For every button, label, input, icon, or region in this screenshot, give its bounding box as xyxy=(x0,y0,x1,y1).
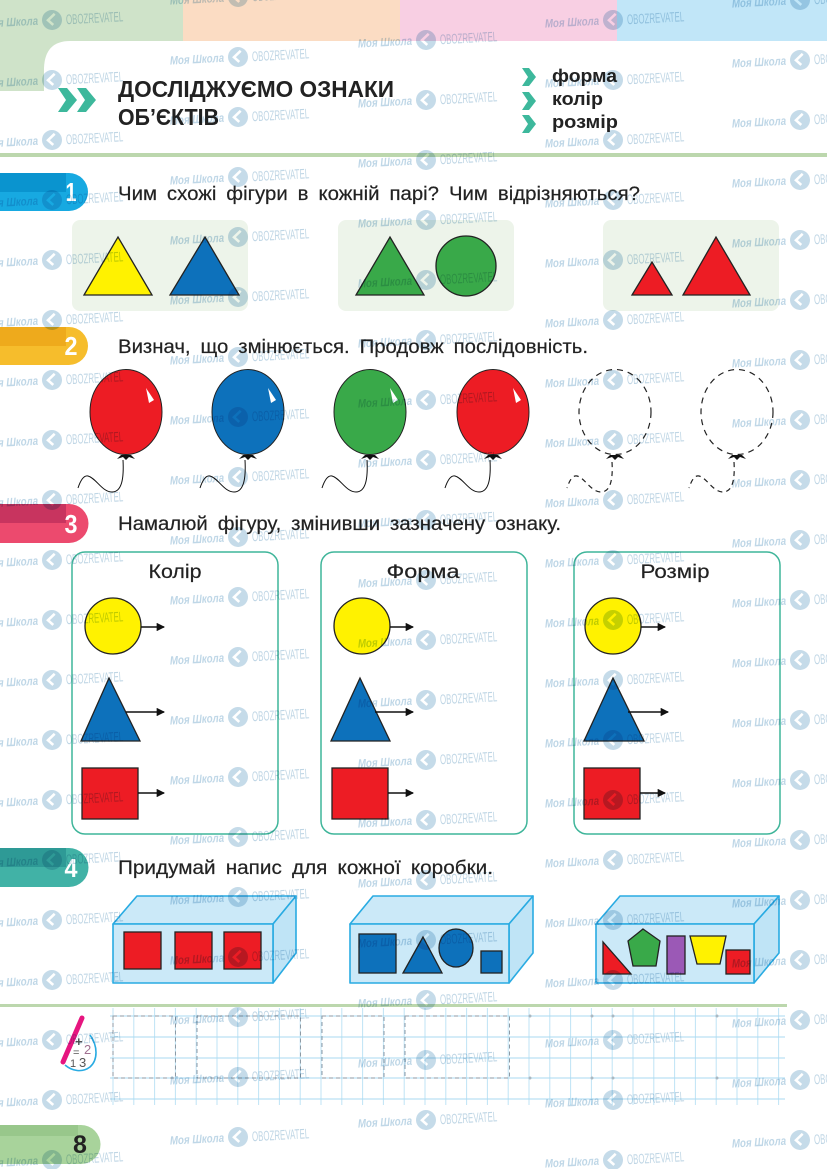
text: OBOZREVATEL xyxy=(252,527,310,545)
text: OBOZREVATEL xyxy=(440,1110,498,1128)
text: OBOZREVATEL xyxy=(627,790,685,808)
text: OBOZREVATEL xyxy=(627,910,685,928)
text: Моя Школа xyxy=(545,195,599,211)
text: OBOZREVATEL xyxy=(66,130,124,148)
text: Моя Школа xyxy=(545,915,599,931)
text: OBOZREVATEL xyxy=(440,210,498,228)
text: OBOZREVATEL xyxy=(252,1007,310,1025)
tab: task 4 xyxy=(0,848,88,887)
text: OBOZREVATEL xyxy=(627,370,685,388)
text: Моя Школа xyxy=(545,375,599,391)
icon: pencil and maths xyxy=(63,1018,96,1071)
text: Моя Школа xyxy=(732,235,786,251)
text: Моя Школа xyxy=(732,175,786,191)
writing grid xyxy=(110,1008,785,1105)
text: Моя Школа xyxy=(170,652,224,668)
text: Моя Школа xyxy=(170,112,224,128)
text: OBOZREVATEL xyxy=(66,1030,124,1048)
tab: task 3 xyxy=(0,504,88,543)
text: Моя Школа xyxy=(545,975,599,991)
text: Моя Школа xyxy=(545,675,599,691)
icon: pencil and maths: 2 xyxy=(84,1042,91,1057)
title xyxy=(118,76,394,130)
text: Моя Школа xyxy=(170,472,224,488)
text: Моя Школа xyxy=(545,1095,599,1111)
text: OBOZREVATEL xyxy=(66,670,124,688)
text: Моя Школа xyxy=(732,775,786,791)
text: Моя Школа xyxy=(170,1132,224,1148)
text: Моя Школа xyxy=(545,255,599,271)
text: Моя Школа xyxy=(358,395,412,411)
text: OBOZREVATEL xyxy=(440,390,498,408)
text: Моя Школа xyxy=(170,292,224,308)
text: OBOZREVATEL xyxy=(252,47,310,65)
text: Моя Школа xyxy=(545,855,599,871)
text: Моя Школа xyxy=(732,535,786,551)
text: Моя Школа xyxy=(732,1015,786,1031)
text: Моя Школа xyxy=(732,715,786,731)
balloon: blue xyxy=(200,370,284,492)
text: OBOZREVATEL xyxy=(66,70,124,88)
text: OBOZREVATEL xyxy=(66,550,124,568)
text: OBOZREVATEL xyxy=(252,167,310,185)
text: Моя Школа xyxy=(358,635,412,651)
topic list: form, colour, size: колір xyxy=(552,89,603,109)
balloon: green xyxy=(322,370,406,492)
text: Моя Школа xyxy=(358,935,412,951)
text: Моя Школа xyxy=(732,835,786,851)
topic list: form, colour, size: розмір xyxy=(552,112,618,132)
text: OBOZREVATEL xyxy=(66,310,124,328)
text: Моя Школа xyxy=(358,875,412,891)
panel: same colour, different shape xyxy=(338,220,514,311)
text: OBOZREVATEL xyxy=(440,870,498,888)
text: Моя Школа xyxy=(170,832,224,848)
text: Моя Школа xyxy=(358,95,412,111)
text: OBOZREVATEL xyxy=(440,270,498,288)
balloon: red second xyxy=(445,370,529,492)
text: OBOZREVATEL xyxy=(440,690,498,708)
text: OBOZREVATEL xyxy=(252,947,310,965)
text: Моя Школа xyxy=(732,55,786,71)
text: Моя Школа xyxy=(170,172,224,188)
panel: size: Розмір xyxy=(640,562,710,583)
text: OBOZREVATEL xyxy=(627,970,685,988)
topic list: form, colour, size: форма xyxy=(552,66,618,86)
icon: pencil and maths: + xyxy=(75,1034,83,1049)
text: OBOZREVATEL xyxy=(440,30,498,48)
text: OBOZREVATEL xyxy=(627,850,685,868)
text: OBOZREVATEL xyxy=(66,790,124,808)
text: Моя Школа xyxy=(732,1075,786,1091)
text: OBOZREVATEL xyxy=(627,250,685,268)
text: OBOZREVATEL xyxy=(440,750,498,768)
panel: same shape, different colour xyxy=(72,220,248,311)
title: ОБ’ЄКТІВ xyxy=(118,104,219,130)
text: OBOZREVATEL xyxy=(252,1067,310,1085)
text: OBOZREVATEL xyxy=(440,90,498,108)
text: Моя Школа xyxy=(545,75,599,91)
text: Моя Школа xyxy=(358,815,412,831)
text: OBOZREVATEL xyxy=(252,767,310,785)
text: OBOZREVATEL xyxy=(252,467,310,485)
text: OBOZREVATEL xyxy=(252,887,310,905)
text: Моя Школа xyxy=(170,52,224,68)
text: OBOZREVATEL xyxy=(66,430,124,448)
title: ДОСЛІДЖУЄМО ОЗНАКИ xyxy=(118,76,394,102)
text: Моя Школа xyxy=(545,15,599,31)
text: OBOZREVATEL xyxy=(627,10,685,28)
text: Моя Школа xyxy=(545,555,599,571)
text: Моя Школа xyxy=(170,952,224,968)
panel: shape xyxy=(321,552,527,834)
text: OBOZREVATEL xyxy=(252,227,310,245)
page number tab: 8 xyxy=(73,1131,87,1159)
text: Моя Школа xyxy=(170,772,224,788)
text: OBOZREVATEL xyxy=(66,970,124,988)
task 2 instruction: Визнач, що змінюється. Продовж послідовність. xyxy=(118,337,588,358)
text: Моя Школа xyxy=(170,232,224,248)
text: OBOZREVATEL xyxy=(252,587,310,605)
text: OBOZREVATEL xyxy=(627,1090,685,1108)
text: OBOZREVATEL xyxy=(440,930,498,948)
panel: size xyxy=(574,552,780,834)
tab: task 4: 4 xyxy=(64,853,78,883)
text: OBOZREVATEL xyxy=(627,1030,685,1048)
text: Моя Школа xyxy=(358,335,412,351)
topic list: form, colour, size xyxy=(522,66,618,133)
text: OBOZREVATEL xyxy=(440,990,498,1008)
text: Моя Школа xyxy=(358,515,412,531)
tab: task 1: 1 xyxy=(66,177,76,207)
balloon: red xyxy=(78,370,162,492)
text: Моя Школа xyxy=(545,1035,599,1051)
balloon: dashed outline two xyxy=(689,370,773,492)
text: OBOZREVATEL xyxy=(440,630,498,648)
text: OBOZREVATEL xyxy=(627,430,685,448)
text: OBOZREVATEL xyxy=(66,730,124,748)
text: OBOZREVATEL xyxy=(440,1050,498,1068)
text: Моя Школа xyxy=(358,35,412,51)
text: OBOZREVATEL xyxy=(66,610,124,628)
task 3 instruction: Намалюй фігуру, змінивши зазначену ознаку. xyxy=(118,514,561,535)
text: OBOZREVATEL xyxy=(252,647,310,665)
text: Моя Школа xyxy=(358,695,412,711)
panel: shape: Форма xyxy=(386,562,460,583)
box: mixed shapes xyxy=(596,896,779,983)
text: Моя Школа xyxy=(545,315,599,331)
text: OBOZREVATEL xyxy=(440,810,498,828)
tab: task 1 xyxy=(0,173,88,211)
panel: colour: Колір xyxy=(148,562,202,583)
box: red squares xyxy=(113,896,296,983)
text: Моя Школа xyxy=(358,1115,412,1131)
text: Моя Школа xyxy=(545,135,599,151)
box: blue shapes xyxy=(350,896,533,983)
text: OBOZREVATEL xyxy=(252,107,310,125)
text: OBOZREVATEL xyxy=(627,130,685,148)
text: Моя Школа xyxy=(358,455,412,471)
panel: same shape, different size xyxy=(603,220,779,311)
tab: task 2: 2 xyxy=(64,331,78,361)
text: Моя Школа xyxy=(358,995,412,1011)
text: OBOZREVATEL xyxy=(66,250,124,268)
panel: colour xyxy=(72,552,278,834)
text: Моя Школа xyxy=(170,532,224,548)
text: OBOZREVATEL xyxy=(66,910,124,928)
text: OBOZREVATEL xyxy=(66,490,124,508)
text: OBOZREVATEL xyxy=(440,330,498,348)
text: Моя Школа xyxy=(358,275,412,291)
text: Моя Школа xyxy=(170,712,224,728)
text: Моя Школа xyxy=(170,352,224,368)
text: OBOZREVATEL xyxy=(627,310,685,328)
text: Моя Школа xyxy=(732,895,786,911)
task 4 instruction: Придумай напис для кожної коробки. xyxy=(118,858,493,879)
text: Моя Школа xyxy=(358,215,412,231)
text: OBOZREVATEL xyxy=(627,70,685,88)
text: Моя Школа xyxy=(732,475,786,491)
text: OBOZREVATEL xyxy=(440,510,498,528)
text: OBOZREVATEL xyxy=(627,610,685,628)
text: Моя Школа xyxy=(170,1072,224,1088)
text: Моя Школа xyxy=(170,592,224,608)
text: OBOZREVATEL xyxy=(440,150,498,168)
text: OBOZREVATEL xyxy=(66,370,124,388)
text: OBOZREVATEL xyxy=(66,190,124,208)
text: Моя Школа xyxy=(732,595,786,611)
text: OBOZREVATEL xyxy=(66,1150,124,1168)
text: OBOZREVATEL xyxy=(252,407,310,425)
text: OBOZREVATEL xyxy=(252,1127,310,1145)
icon: pencil and maths: 3 xyxy=(79,1055,86,1070)
text: Моя Школа xyxy=(358,575,412,591)
text: Моя Школа xyxy=(732,415,786,431)
icon: pencil and maths: 1 xyxy=(70,1058,76,1070)
page number tab xyxy=(0,1125,100,1164)
text: Моя Школа xyxy=(170,1012,224,1028)
text: Моя Школа xyxy=(358,755,412,771)
text: OBOZREVATEL xyxy=(252,707,310,725)
text: Моя Школа xyxy=(732,955,786,971)
text: OBOZREVATEL xyxy=(252,287,310,305)
text: OBOZREVATEL xyxy=(252,347,310,365)
text: Моя Школа xyxy=(545,735,599,751)
text: OBOZREVATEL xyxy=(627,190,685,208)
text: OBOZREVATEL xyxy=(252,827,310,845)
tab: task 2 xyxy=(0,327,88,365)
text: Моя Школа xyxy=(732,655,786,671)
text: Моя Школа xyxy=(545,435,599,451)
text: OBOZREVATEL xyxy=(66,1090,124,1108)
icon: double chevron xyxy=(58,88,96,112)
text: Моя Школа xyxy=(732,115,786,131)
text: OBOZREVATEL xyxy=(627,1150,685,1168)
text: Моя Школа xyxy=(545,795,599,811)
icon: pencil and maths: = xyxy=(73,1047,79,1059)
header colour bands xyxy=(0,0,827,157)
text: Моя Школа xyxy=(170,412,224,428)
text: OBOZREVATEL xyxy=(627,490,685,508)
balloon: dashed outline one xyxy=(567,370,651,492)
text: OBOZREVATEL xyxy=(627,670,685,688)
text: Моя Школа xyxy=(732,1135,786,1151)
text: OBOZREVATEL xyxy=(66,10,124,28)
text: Моя Школа xyxy=(545,495,599,511)
text: Моя Школа xyxy=(732,355,786,371)
text: Моя Школа xyxy=(170,892,224,908)
text: OBOZREVATEL xyxy=(66,850,124,868)
text: Моя Школа xyxy=(545,615,599,631)
text: Моя Школа xyxy=(358,155,412,171)
task 1 question: Чим схожі фігури в кожній парі? Чим відрізняються? xyxy=(118,184,640,205)
text: OBOZREVATEL xyxy=(627,730,685,748)
text: OBOZREVATEL xyxy=(440,570,498,588)
text: OBOZREVATEL xyxy=(440,450,498,468)
text: OBOZREVATEL xyxy=(627,550,685,568)
tab: task 3: 3 xyxy=(64,509,78,539)
text: Моя Школа xyxy=(732,295,786,311)
text: Моя Школа xyxy=(358,1055,412,1071)
